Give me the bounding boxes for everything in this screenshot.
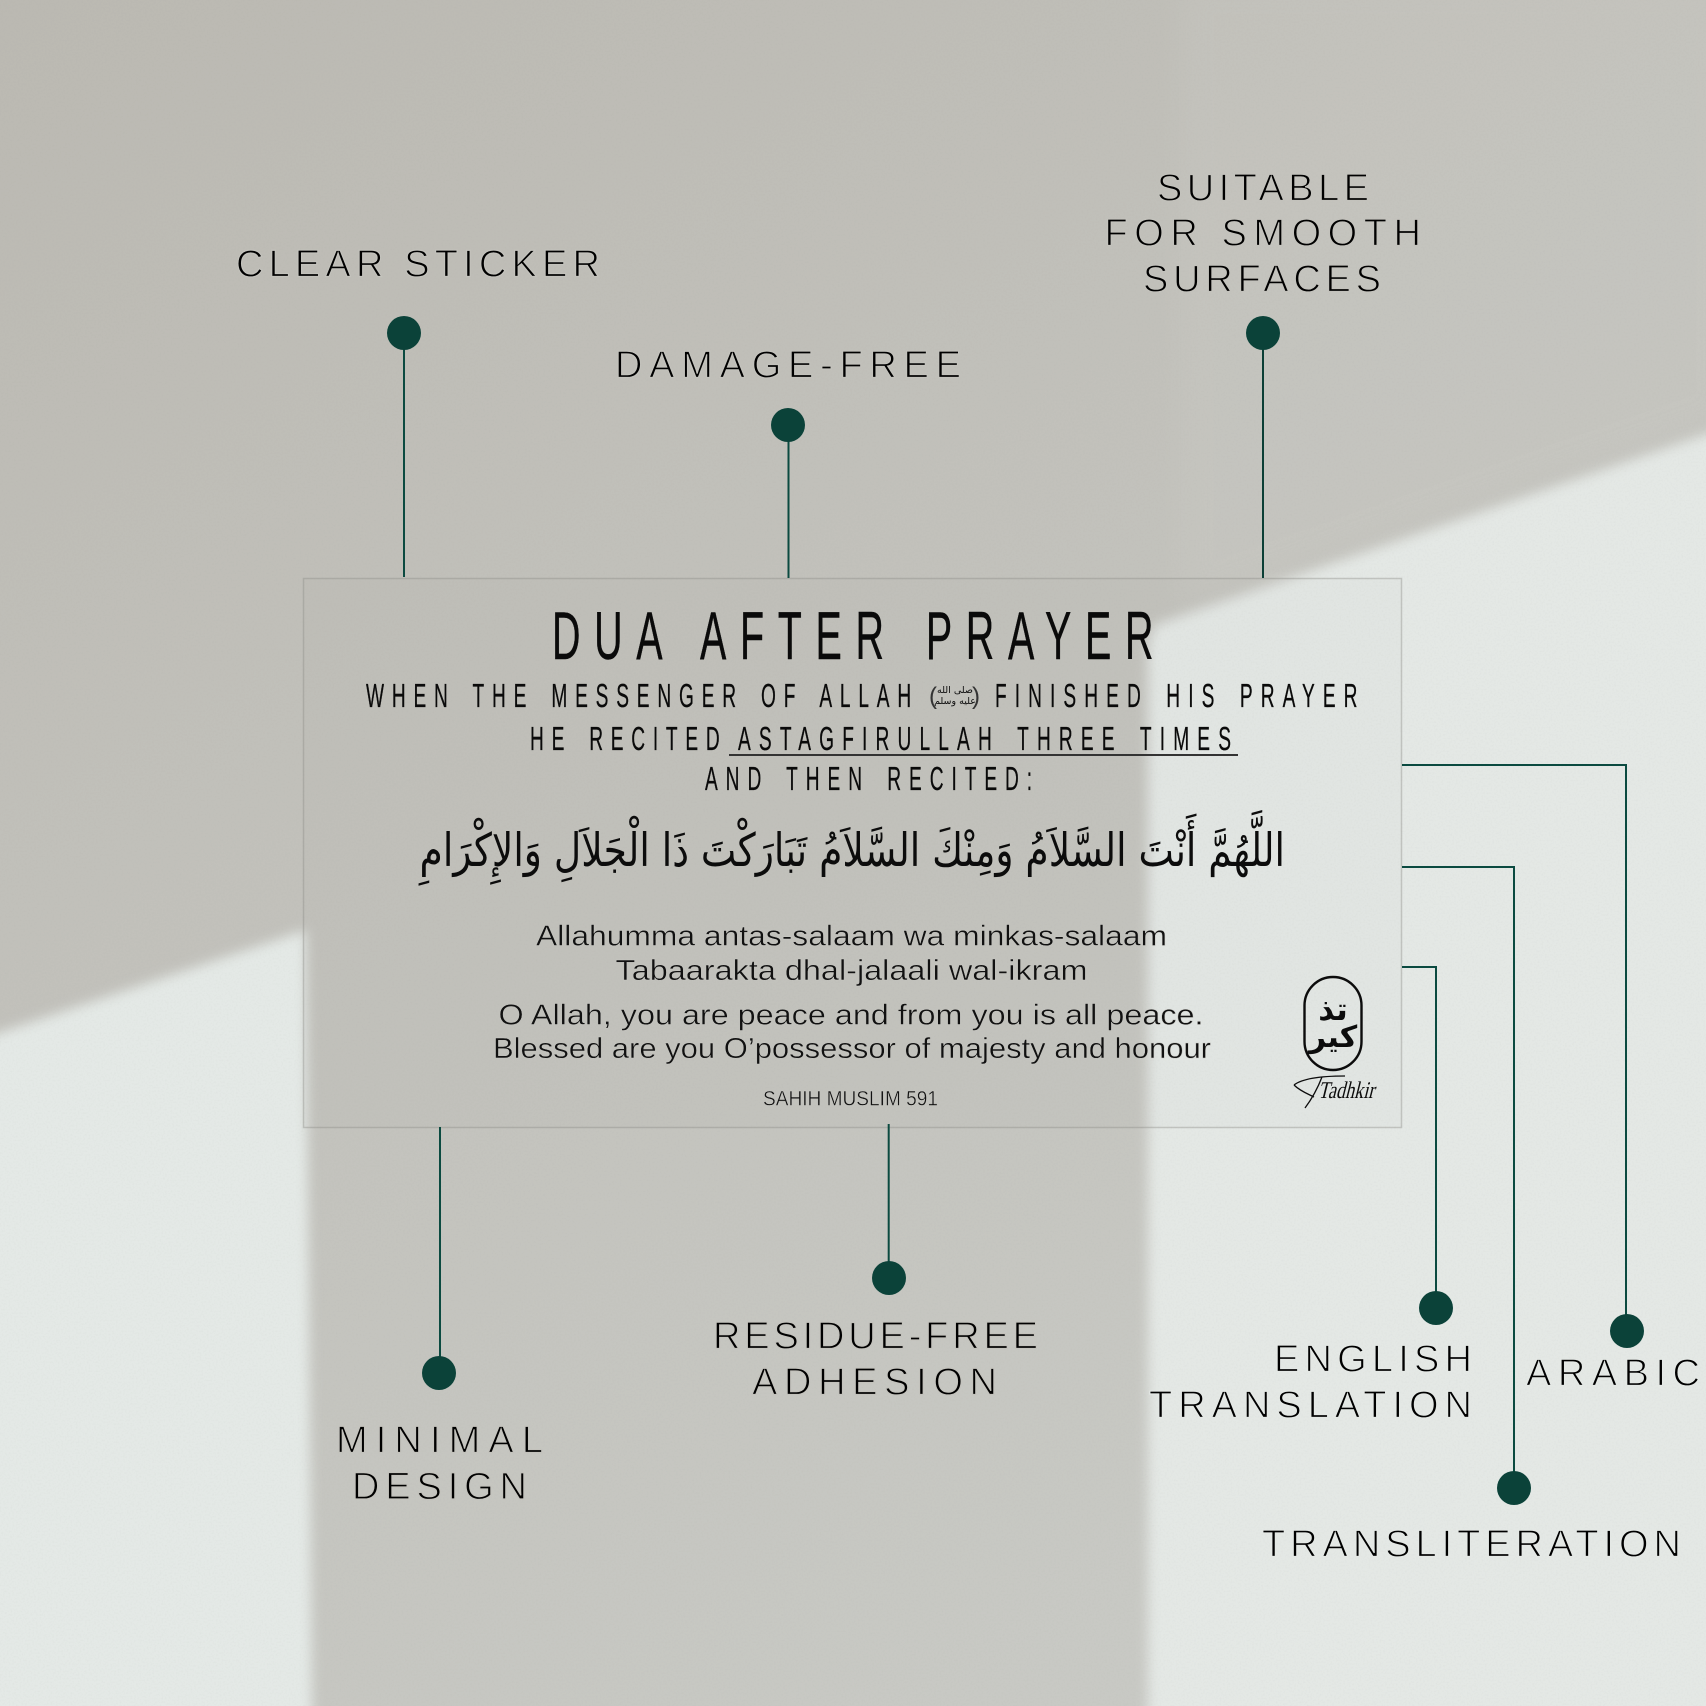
callout: clear sticker: CLEAR STICKER	[236, 244, 600, 286]
icon: Tadhkir logo: كير	[1307, 1020, 1358, 1055]
text block: intro line 2: HE RECITED	[530, 721, 720, 757]
text block: intro line 1	[366, 678, 1358, 714]
callout: suitable for smooth surfaces: SURFACES	[1143, 259, 1381, 301]
panel: clear sticker card	[304, 578, 1402, 1128]
callout: minimal design: DESIGN	[352, 1466, 527, 1508]
text block: source reference: SAHIH MUSLIM 591	[763, 1088, 938, 1110]
title: DUA AFTER PRAYER	[552, 598, 1153, 674]
text block: transliteration: Allahumma antas-salaam wa minkas-salaam	[536, 920, 1167, 952]
text block: arabic dua: اللَّهُمَّ أَنْتَ السَّلاَمُ وَمِنْكَ السَّلاَمُ تَبَارَكْتَ ذَا الْجَلاَلِ وَالإِكْرَامِ	[418, 809, 1285, 886]
callout: suitable for smooth surfaces: SUITABLE	[1157, 168, 1369, 210]
callout: minimal design	[336, 1127, 543, 1508]
callout: transliteration	[1262, 867, 1681, 1566]
text block: english translation	[493, 1000, 1211, 1065]
icon: honorific calligraphy: )	[972, 683, 980, 710]
icon: Tadhkir logo	[1294, 977, 1379, 1108]
callout: minimal design: MINIMAL	[336, 1420, 543, 1462]
text block: intro line 2: ASTAGFIRULLAH THREE TIMES	[738, 721, 1231, 757]
callout: suitable for smooth surfaces	[1104, 168, 1421, 578]
callout: arabic	[1402, 765, 1700, 1395]
callout: residue-free adhesion	[713, 1124, 1038, 1404]
text block: intro line 1: WHEN THE MESSENGER OF ALLAH	[366, 678, 911, 714]
text block: transliteration: Tabaarakta dhal-jalaali wal-ikram	[616, 955, 1088, 987]
text block: transliteration	[536, 920, 1167, 987]
icon: honorific calligraphy: صلى الله	[937, 685, 973, 696]
text block: intro line 3: AND THEN RECITED:	[705, 761, 1032, 797]
callout: damage-free	[615, 345, 961, 578]
text block: english translation: O Allah, you are peace and from you is all peace.	[498, 1000, 1204, 1032]
callout: suitable for smooth surfaces: FOR SMOOTH	[1104, 213, 1421, 255]
callout: arabic: ARABIC	[1526, 1353, 1700, 1395]
text block: intro line 2	[530, 721, 1238, 757]
callout: damage-free: DAMAGE-FREE	[615, 345, 961, 387]
callout: residue-free adhesion: RESIDUE-FREE	[713, 1316, 1038, 1358]
icon: honorific calligraphy: (	[929, 683, 937, 710]
icon: Tadhkir logo: تذ	[1318, 992, 1348, 1028]
icon: honorific calligraphy	[929, 683, 980, 710]
callout: english translation	[1149, 967, 1472, 1427]
text block: english translation: Blessed are you O’possessor of majesty and honour	[493, 1033, 1211, 1065]
callout: residue-free adhesion: ADHESION	[752, 1362, 997, 1404]
callout: english translation: ENGLISH	[1274, 1339, 1472, 1381]
text block: intro line 1: FINISHED HIS PRAYER	[995, 678, 1357, 714]
callout: english translation: TRANSLATION	[1149, 1385, 1472, 1427]
icon: Tadhkir logo: Tadhkir	[1317, 1077, 1379, 1104]
icon: honorific calligraphy: عليه وسلم	[934, 696, 976, 707]
callout: transliteration: TRANSLITERATION	[1262, 1524, 1681, 1566]
callout: clear sticker	[236, 244, 600, 577]
